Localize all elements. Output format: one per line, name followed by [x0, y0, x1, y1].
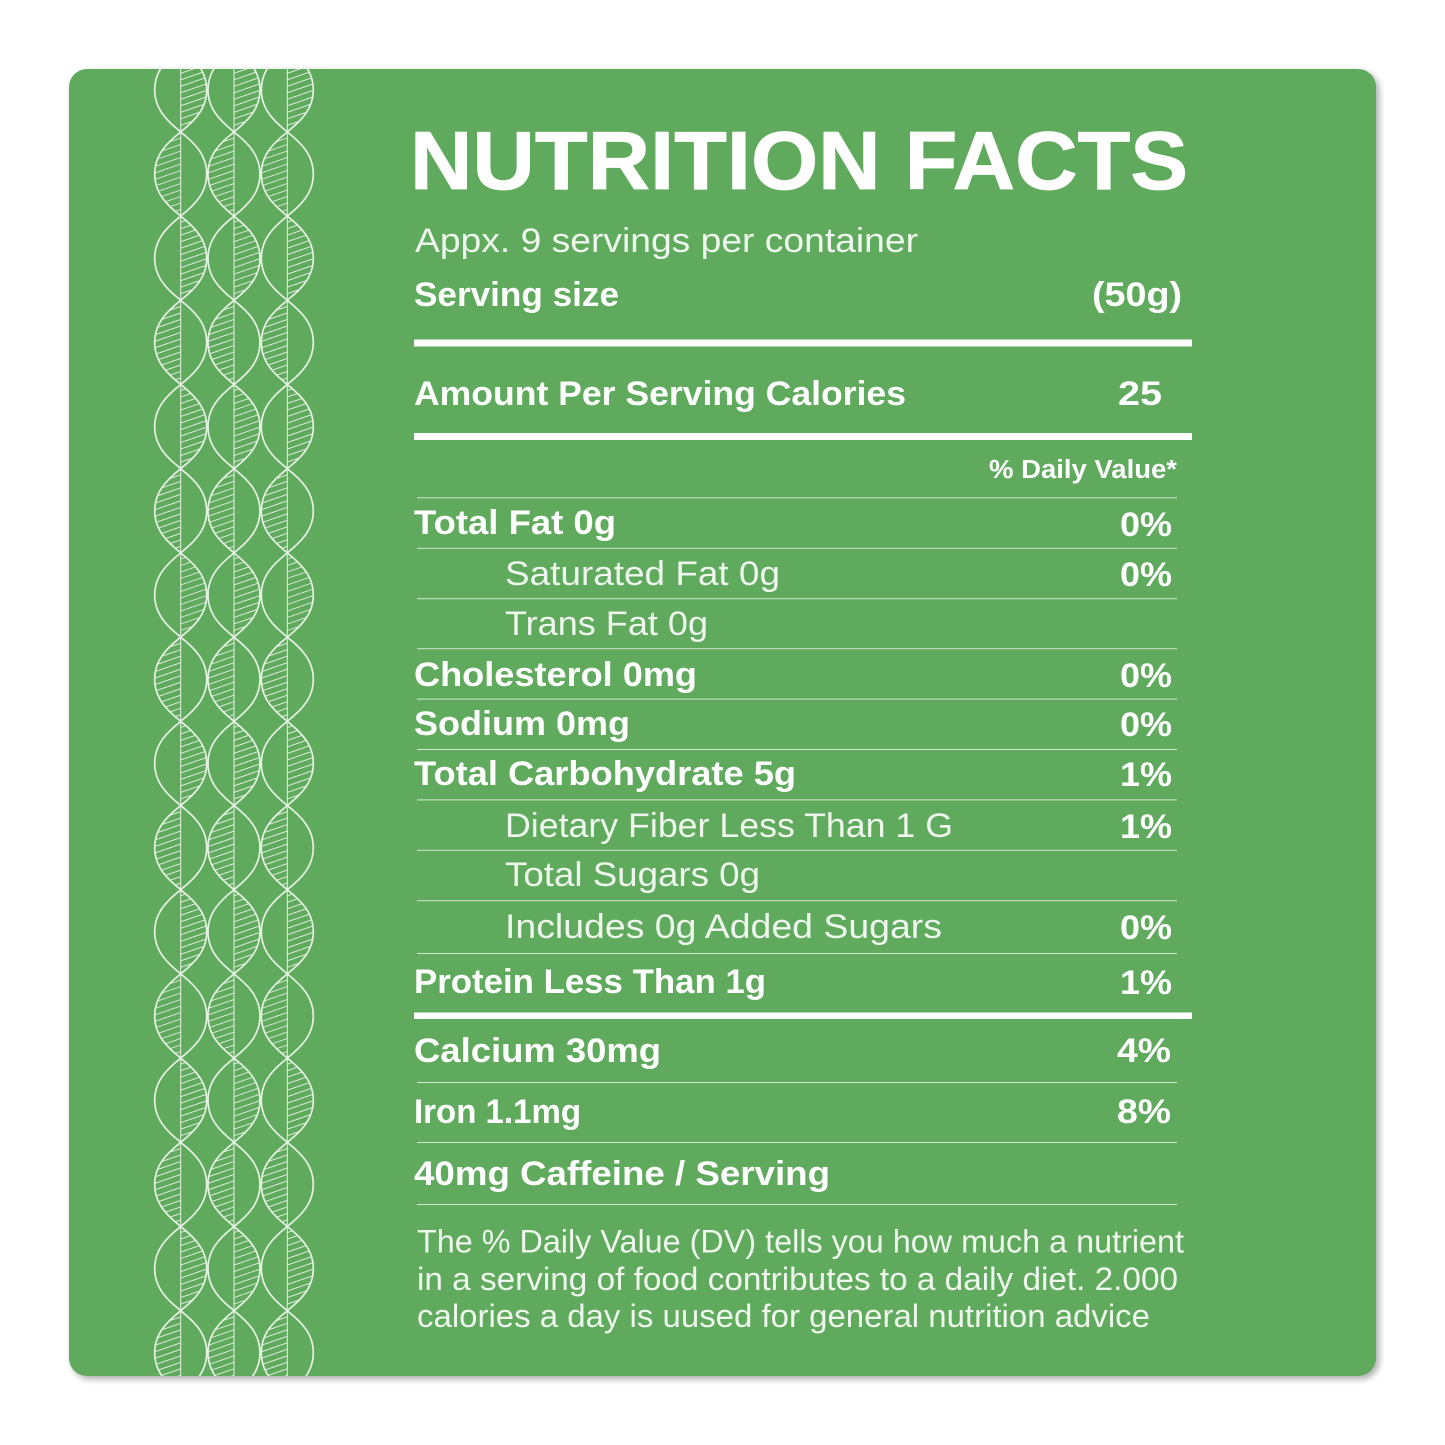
row: total sugars: Total Sugars 0g: [505, 856, 760, 894]
row: calcium: [414, 1032, 1171, 1070]
calories row: [414, 375, 1162, 413]
row: saturated fat: Saturated Fat 0g: [505, 555, 780, 593]
row: protein: Protein Less Than 1g: [414, 963, 766, 1001]
title: NUTRITION FACTS: [410, 114, 1188, 207]
row: total carbohydrate: Total Carbohydrate 5g: [414, 755, 796, 793]
row: total fat: Total Fat 0g: [414, 504, 616, 542]
calories row: 25: [1118, 375, 1162, 413]
row: iron: [414, 1093, 1171, 1131]
DNA helix pattern: [155, 45, 313, 1404]
row: caffeine: 40mg Caffeine / Serving: [414, 1155, 830, 1193]
footnote: calories a day is uused for general nutrition advice: [417, 1298, 1150, 1334]
row: iron: Iron 1.1mg: [414, 1093, 581, 1131]
row: saturated fat: [505, 555, 1172, 594]
row: dietary fiber: Dietary Fiber Less Than 1 G: [505, 807, 953, 845]
row: sodium: 0%: [1120, 706, 1172, 744]
row: dietary fiber: [505, 807, 1172, 846]
serving size row: (50g): [1092, 276, 1182, 314]
row: sodium: Sodium 0mg: [414, 705, 630, 743]
row: dietary fiber: 1%: [1120, 808, 1172, 846]
serving size row: Serving size: [414, 276, 619, 314]
row: protein: 1%: [1120, 964, 1172, 1002]
row: cholesterol: 0%: [1120, 657, 1172, 695]
footnote: The % Daily Value (DV) tells you how much a nutrient: [417, 1224, 1184, 1260]
row: total carbohydrate: 1%: [1120, 756, 1172, 794]
servings per container: Appx. 9 servings per container: [415, 222, 918, 260]
row: iron: 8%: [1117, 1093, 1171, 1131]
footnote: in a serving of food contributes to a daily diet. 2.000: [417, 1261, 1178, 1297]
row: total carbohydrate: [414, 755, 1172, 794]
row: added sugars: 0%: [1120, 909, 1172, 947]
row: cholesterol: Cholesterol 0mg: [414, 656, 697, 694]
row: trans fat: Trans Fat 0g: [505, 605, 708, 643]
row: calcium: Calcium 30mg: [414, 1032, 661, 1070]
daily value header: % Daily Value*: [989, 456, 1177, 484]
calories row: Amount Per Serving Calories: [414, 375, 906, 413]
row: calcium: 4%: [1117, 1032, 1171, 1070]
row: cholesterol: [414, 656, 1172, 695]
row: saturated fat: 0%: [1120, 556, 1172, 594]
row: sodium: [414, 705, 1172, 744]
row: added sugars: Includes 0g Added Sugars: [505, 908, 942, 946]
row: protein: [414, 963, 1172, 1002]
serving size row: [414, 276, 1182, 314]
row: total fat: 0%: [1120, 506, 1172, 544]
footnote: [417, 1224, 1184, 1334]
row: added sugars: [505, 908, 1172, 947]
row: total fat: [414, 504, 1172, 544]
